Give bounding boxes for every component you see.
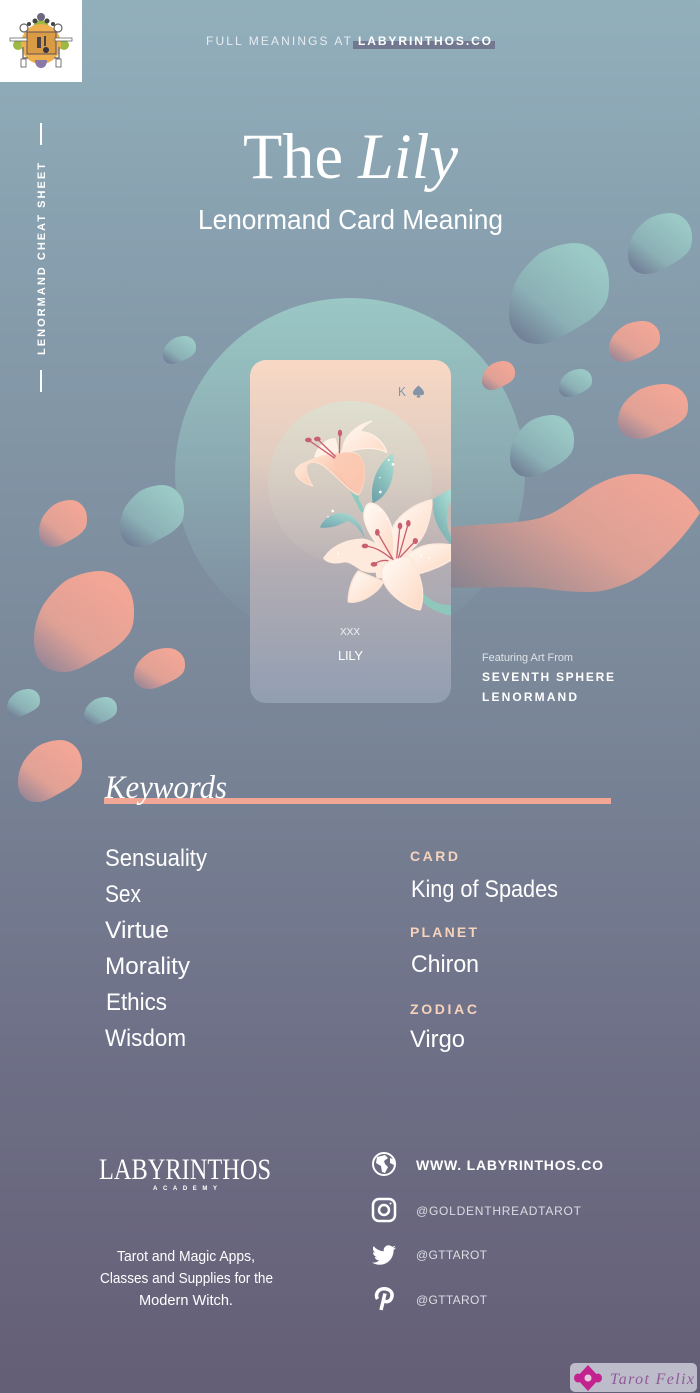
tarot card [250, 360, 451, 703]
card number: XXX [340, 627, 360, 638]
planet correspondence [410, 924, 479, 978]
card name: LILY [338, 648, 363, 663]
watermark badge: Tarot Felix [610, 1371, 694, 1388]
art credit: LENORMAND [482, 690, 577, 704]
art credit: SEVENTH SPHERE [482, 670, 614, 684]
keywords heading: Keywords [104, 770, 227, 806]
zodiac correspondence: ZODIAC [410, 1001, 477, 1017]
icon: globe [373, 1153, 395, 1175]
pinterest handle: @GTTAROT [416, 1293, 488, 1307]
small lily [295, 421, 394, 513]
icon: twitter [372, 1245, 396, 1265]
keywords list: Ethics [106, 989, 167, 1016]
instagram handle: @GOLDENTHREADTAROT [416, 1204, 582, 1218]
keywords list: Virtue [105, 917, 169, 944]
labyrinthos logo: ACADEMY [153, 1186, 217, 1192]
moon disc [268, 401, 432, 565]
card correspondence [410, 848, 558, 903]
art credit [482, 652, 614, 704]
icon: pinterest [377, 1289, 392, 1310]
header link: FULL MEANINGS AT [206, 34, 352, 48]
twitter handle: @GTTAROT [416, 1248, 488, 1262]
zodiac correspondence: Virgo [410, 1026, 465, 1053]
icon: instagram [373, 1199, 395, 1221]
title: The [243, 121, 343, 193]
card corner: king of spades: K [398, 384, 406, 399]
planet correspondence: Chiron [411, 951, 479, 978]
website link: WWW. LABYRINTHOS.CO [416, 1157, 603, 1173]
tagline: Classes and Supplies for the [100, 1271, 273, 1287]
keywords list: Sex [105, 881, 141, 908]
tagline [100, 1249, 273, 1309]
background circle [175, 298, 525, 648]
logo badge [0, 0, 82, 82]
keywords list: Sensuality [105, 845, 207, 872]
card correspondence: CARD [410, 848, 458, 864]
coral wave shape [420, 474, 700, 592]
large lily [320, 489, 451, 616]
subtitle: Lenormand Card Meaning [198, 204, 503, 235]
art credit: Featuring Art From [482, 652, 573, 664]
zodiac correspondence [410, 1001, 477, 1053]
keywords list: Morality [105, 953, 190, 980]
card corner: king of spades [398, 384, 424, 399]
title: Lily [357, 121, 458, 193]
planet correspondence: PLANET [410, 924, 477, 940]
labyrinthos logo: LABYRINTHOS [99, 1153, 271, 1186]
tagline: Modern Witch. [139, 1293, 233, 1309]
keywords rule [104, 798, 611, 804]
header link: LABYRINTHOS.CO [358, 34, 491, 48]
watermark badge [570, 1363, 697, 1392]
header link [206, 34, 495, 49]
sidebar label: LENORMAND CHEAT SHEET [36, 163, 48, 355]
card correspondence: King of Spades [411, 876, 558, 903]
title [243, 121, 458, 193]
floating blobs [7, 213, 692, 802]
keywords list: Wisdom [105, 1025, 186, 1052]
keywords list [105, 845, 207, 1052]
tagline: Tarot and Magic Apps, [117, 1249, 255, 1265]
